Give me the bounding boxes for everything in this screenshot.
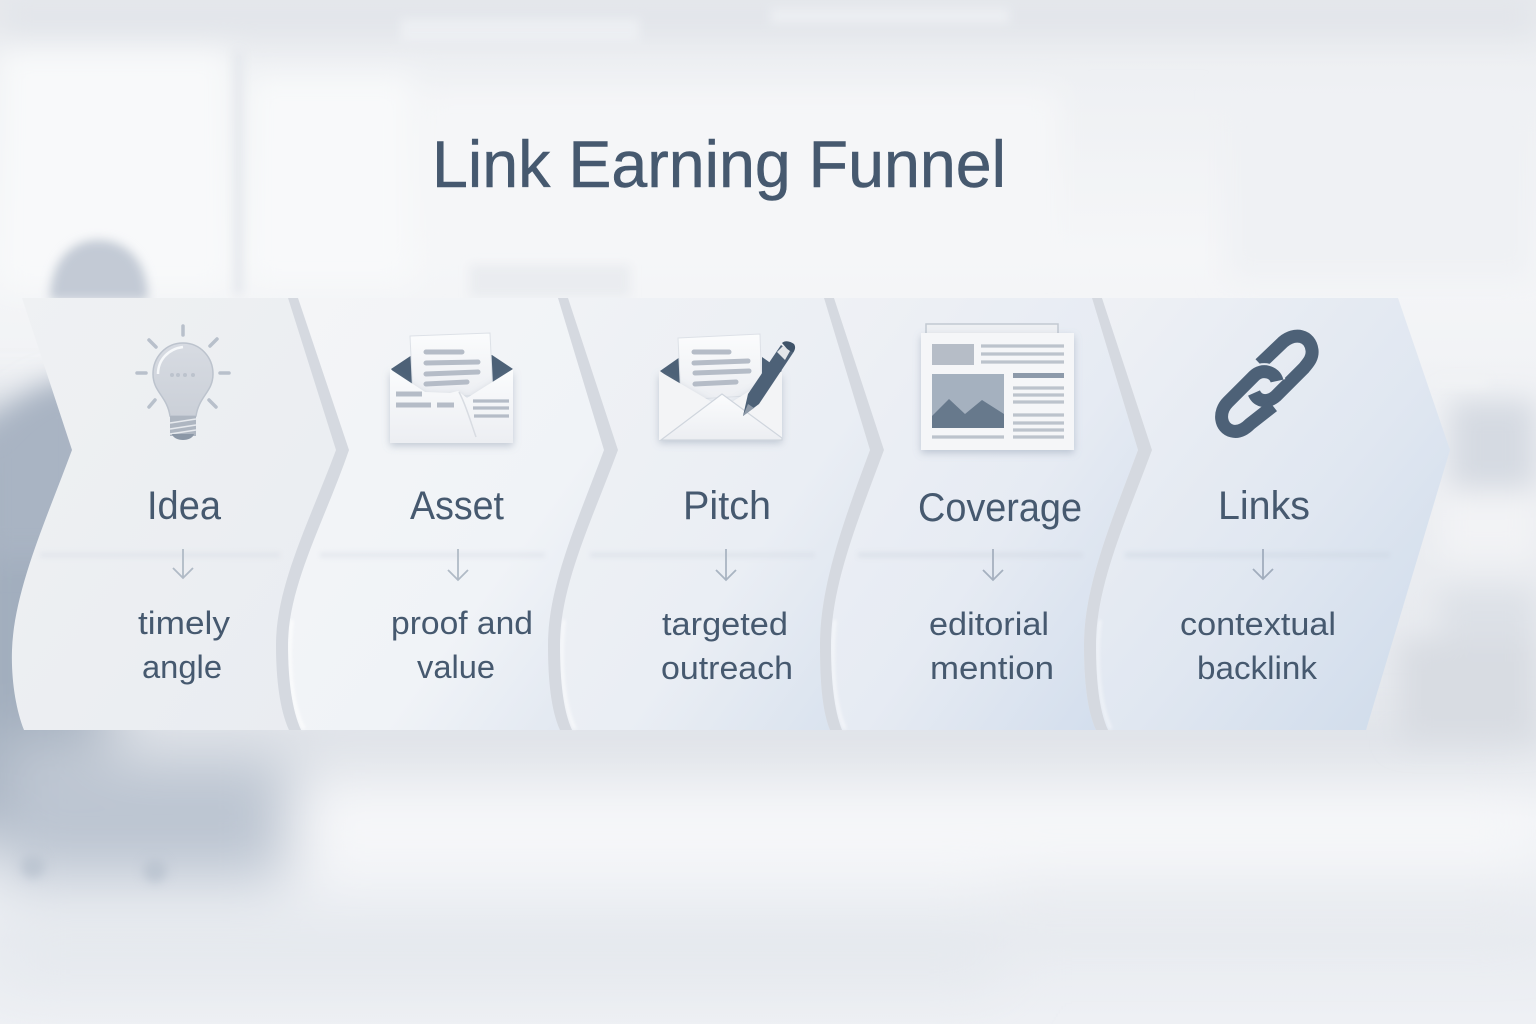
icon: light bulb: [137, 326, 229, 440]
description: contextual backlink: backlink: [1197, 650, 1318, 686]
label: Links: Links: [1218, 484, 1310, 528]
description: editorial mention: [929, 606, 1054, 686]
title: Link Earning Funnel: [432, 127, 1006, 201]
arrow: [173, 549, 193, 578]
description: targeted outreach: targeted: [662, 606, 788, 642]
icon: envelope and pen: [659, 334, 795, 440]
icon: newspaper: [921, 324, 1074, 450]
panel: Asset: [288, 298, 604, 730]
arrow: [448, 549, 468, 580]
description: timely angle: angle: [142, 649, 222, 685]
description: targeted outreach: [661, 606, 793, 686]
label: Idea: Idea: [147, 484, 222, 528]
description: proof and value: proof and: [391, 605, 533, 641]
description: contextual backlink: [1180, 606, 1336, 686]
chevron separators: [276, 298, 1152, 730]
label: Coverage: Coverage: [918, 486, 1082, 530]
description: timely angle: [138, 605, 230, 685]
panel: Pitch: [560, 298, 870, 730]
description: proof and value: value: [417, 649, 495, 685]
panel: Links: [1096, 298, 1450, 730]
description: timely angle: timely: [138, 605, 230, 641]
label: Asset: Asset: [410, 484, 504, 528]
arrow: [716, 549, 736, 580]
icon: open envelope with letter: [390, 333, 513, 443]
funnel chevrons: [12, 298, 1450, 730]
arrow: [1253, 549, 1273, 579]
label: Pitch: Pitch: [683, 484, 771, 528]
arrow: [983, 549, 1003, 580]
panel: Idea: [12, 298, 336, 730]
icon: chain link: [1222, 336, 1312, 431]
description: contextual backlink: contextual: [1180, 606, 1336, 642]
description: targeted outreach: outreach: [661, 650, 793, 686]
description: proof and value: [391, 605, 533, 685]
description: editorial mention: mention: [930, 650, 1054, 686]
description: editorial mention: editorial: [929, 606, 1049, 642]
panel: Coverage: [831, 298, 1138, 730]
